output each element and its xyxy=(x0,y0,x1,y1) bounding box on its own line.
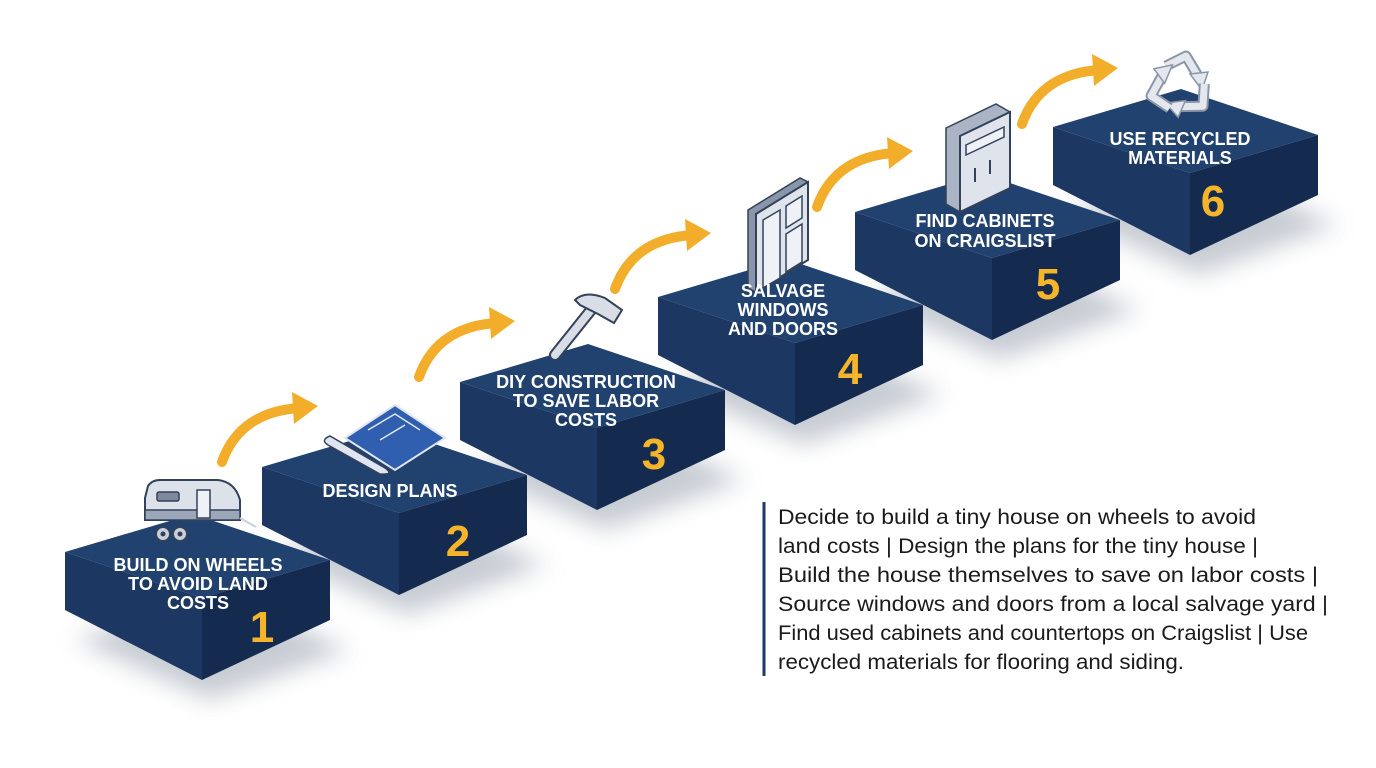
label 1 xyxy=(114,555,282,613)
block 5 xyxy=(855,174,1140,360)
label 1: COSTS xyxy=(167,593,229,613)
block 4 xyxy=(658,259,943,445)
icon: recycle xyxy=(1140,56,1213,125)
label 1: TO AVOID LAND xyxy=(128,574,268,594)
icon: trailer xyxy=(145,480,256,541)
label 5: ON CRAIGSLIST xyxy=(914,231,1056,251)
label 4: WINDOWS xyxy=(738,300,828,320)
description text: recycled materials for flooring and siding. xyxy=(778,651,1184,674)
arrow 3 xyxy=(615,219,711,289)
label 3: TO SAVE LABOR xyxy=(513,391,659,411)
arrow 5 xyxy=(1022,54,1118,124)
arrow 4 xyxy=(817,137,913,207)
label 4: AND DOORS xyxy=(728,319,838,339)
block 3 xyxy=(460,344,745,530)
description text: Find used cabinets and countertops on Craigslist | Use xyxy=(778,622,1308,645)
label 1: BUILD ON WHEELS xyxy=(114,555,282,575)
description text: Source windows and doors from a local salvage yard | xyxy=(778,593,1328,616)
icon: window xyxy=(748,178,808,292)
number 3: 3 xyxy=(642,430,666,479)
label 3: DIY CONSTRUCTION xyxy=(496,372,676,392)
description text xyxy=(764,502,1328,676)
icon: blueprint xyxy=(324,405,445,474)
label 6: MATERIALS xyxy=(1128,148,1232,168)
description text: Build the house themselves to save on labor costs | xyxy=(778,564,1318,587)
number 6: 6 xyxy=(1201,177,1225,226)
description text: land costs | Design the plans for the tiny house | xyxy=(778,535,1258,558)
label 6 xyxy=(1109,129,1251,168)
number 2: 2 xyxy=(446,517,470,566)
description text: Decide to build a tiny house on wheels to avoid xyxy=(778,506,1256,529)
label 3 xyxy=(496,372,676,430)
label 5 xyxy=(914,211,1056,251)
icon: hammer xyxy=(555,294,622,355)
arrow 2 xyxy=(419,307,515,377)
number 4: 4 xyxy=(838,345,863,394)
arrow 1 xyxy=(222,392,318,462)
label 6: USE RECYCLED xyxy=(1109,129,1251,149)
label 4 xyxy=(728,281,838,339)
label 2: DESIGN PLANS xyxy=(322,481,458,501)
number 1: 1 xyxy=(250,603,274,652)
icon: cabinet xyxy=(946,104,1010,212)
block 6 xyxy=(1053,89,1338,275)
block 2 xyxy=(262,429,547,615)
number 5: 5 xyxy=(1036,260,1060,309)
label 4: SALVAGE xyxy=(741,281,825,301)
label 5: FIND CABINETS xyxy=(916,211,1054,231)
block 1 xyxy=(65,514,350,700)
label 3: COSTS xyxy=(555,410,617,430)
